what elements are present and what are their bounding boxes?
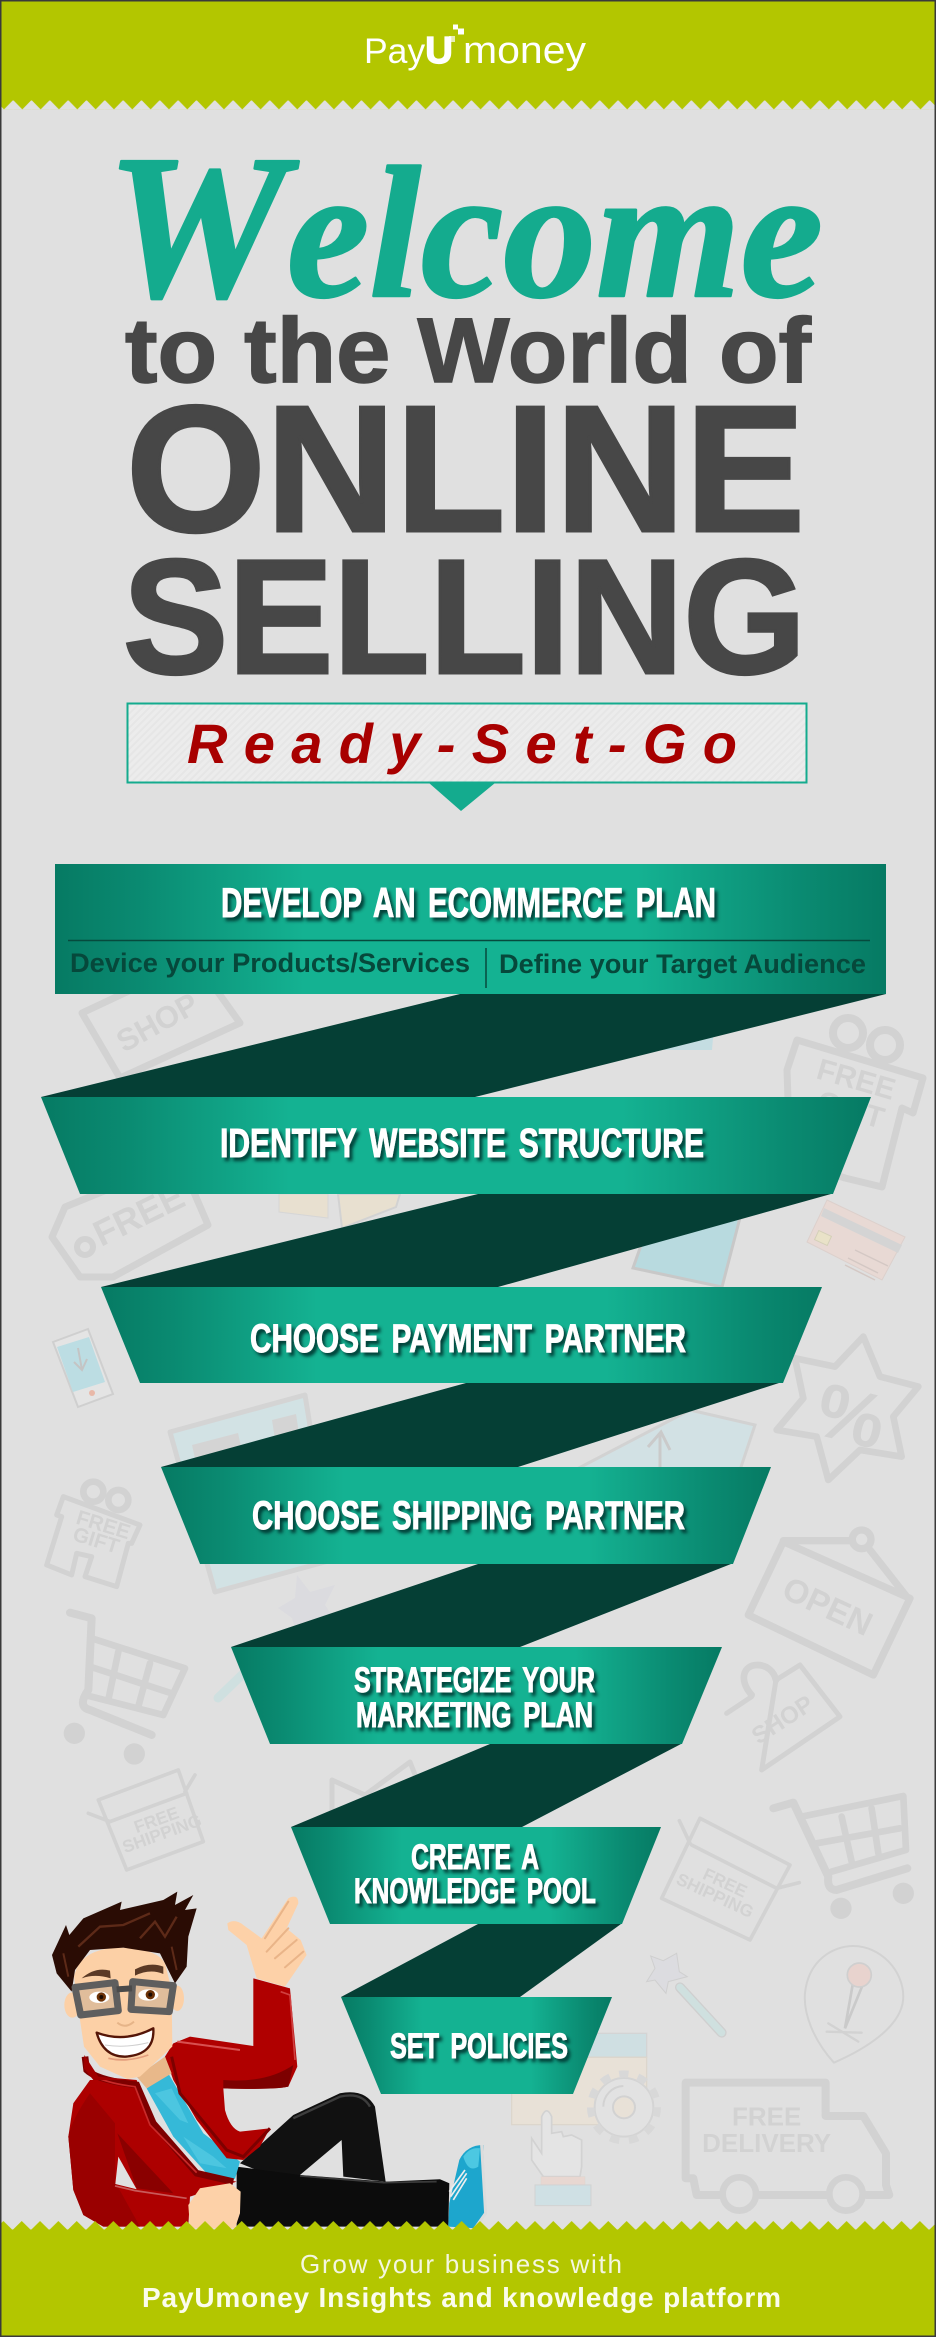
arrow: box pointer: [429, 783, 495, 811]
ribbon fold 4: [231, 1564, 731, 1647]
icon: free shipping right: [662, 1818, 799, 1940]
icon: free delivery truck: [686, 2083, 889, 2211]
icon: free shipping left: [88, 1770, 204, 1870]
panel: identify website structure: IDENTIFY WEBSITE STRUCTURE: [220, 1120, 704, 1166]
nose: [117, 2022, 134, 2026]
icon: settings panel with hand: [512, 2033, 657, 2206]
icon: open sign: OPEN: [777, 1570, 878, 1644]
icon: shopping cart left: [64, 1613, 185, 1765]
icon: free gift left: GIFT: [70, 1523, 122, 1559]
icon: free gift right: GIFT: [813, 1085, 888, 1136]
footer text: second line: PayUmoney Insights and knowledge platform: [142, 2282, 781, 2313]
panel: develop an ecommerce plan: [55, 864, 886, 994]
footer band: [0, 2221, 936, 2337]
icon: boxes behind second fold: [279, 1194, 400, 1228]
panel: create a knowledge pool: KNOWLEDGE POOL: [354, 1872, 596, 1911]
title: to the World of: to the World of: [125, 300, 811, 402]
icon: phone: [53, 1329, 113, 1407]
icon: shop sign: [82, 960, 240, 1078]
fist: [188, 2183, 241, 2228]
icon: percent star: [777, 1337, 918, 1480]
panel: choose payment partner: CHOOSE PAYMENT PARTNER: [250, 1317, 686, 1361]
panel: develop an ecommerce plan: Device your Products/Services: [70, 948, 470, 978]
t-shirt: [147, 2073, 240, 2179]
icon: shop bag: SHOP: [747, 1690, 819, 1750]
icon: map pin: [805, 1946, 903, 2063]
panel: choose shipping partner: [161, 1467, 771, 1564]
ears: [64, 1986, 184, 2018]
icon: free delivery truck: DELIVERY: [702, 2128, 831, 2158]
icon: free shipping right: SHIPPING: [673, 1869, 757, 1922]
eyebrows: [82, 1965, 163, 1978]
icon: free gift left: [47, 1482, 140, 1587]
subtitle box: Ready-Set-Go: Ready-Set-Go: [187, 712, 737, 775]
ribbon fold 6: [341, 1924, 621, 1997]
ribbon fold 5: [291, 1744, 681, 1827]
icon: free gift right: FREE: [813, 1053, 899, 1107]
panel: choose payment partner: [101, 1287, 822, 1383]
icon: free tag: [52, 1160, 208, 1277]
background icons: [47, 960, 923, 2211]
logo: PayUmoney: PayU: [364, 30, 453, 72]
icon: free delivery truck: FREE: [732, 2102, 801, 2132]
logo: PayUmoney: [364, 24, 586, 72]
ribbon fold 3: [161, 1383, 779, 1467]
icon: shop sign: SHOP: [110, 986, 204, 1059]
character: smiling man with glasses: [52, 1892, 486, 2228]
icon: envelope: [332, 1762, 425, 1820]
pointing hand: [227, 1897, 307, 1987]
panel: develop an ecommerce plan: DEVELOP AN ECOMMERCE PLAN: [221, 879, 716, 926]
ribbon fold 2: [101, 1194, 831, 1287]
ribbon fold 1: [41, 994, 886, 1097]
collar: [84, 2055, 147, 2088]
icon: wand behind fold: [218, 1575, 338, 1698]
smile: [97, 2028, 153, 2060]
panel: choose shipping partner: CHOOSE SHIPPING PARTNER: [252, 1494, 685, 1538]
icon: free gift left: FREE: [74, 1506, 133, 1544]
icon: left monitor: [170, 1395, 332, 1592]
panel: strategize your marketing plan: [231, 1647, 722, 1744]
jacket body: [68, 2057, 237, 2227]
panel: identify website structure: [41, 1097, 871, 1194]
panel: develop an ecommerce plan: Define your Target Audience: [499, 949, 866, 979]
title: Welcome: Welcome: [106, 112, 823, 341]
icon: free shipping left: SHIPPING: [120, 1810, 204, 1857]
logo: PayUmoney: money: [463, 30, 586, 72]
icon: free shipping left: FREE: [131, 1802, 181, 1837]
icon: free gift right: [787, 1018, 923, 1187]
icon: shopping cart right: [773, 1796, 914, 1919]
icon: free tag: FREE: [87, 1175, 191, 1254]
icon: wand: [647, 1953, 722, 2033]
face: [74, 1948, 172, 2079]
icon: shop bag: [727, 1665, 840, 1770]
trousers: [237, 2092, 449, 2227]
subtitle box: Ready-Set-Go: [128, 704, 806, 782]
panel: strategize your marketing plan: MARKETING PLAN: [356, 1696, 593, 1735]
header band: [0, 0, 936, 109]
icon: credit card: [807, 1200, 905, 1280]
hair: [52, 1892, 197, 1992]
neck: [137, 2057, 172, 2088]
icon: tablet with arrow: [575, 1410, 755, 1470]
jacket arm and front: [165, 1978, 297, 2160]
title: ONLINE: ONLINE: [126, 369, 805, 570]
glasses and eyes: [75, 1982, 173, 2015]
panel: create a knowledge pool: CREATE A: [411, 1838, 539, 1877]
icon: free shipping right: FREE: [700, 1864, 750, 1901]
footer text: first line: Grow your business with: [300, 2249, 622, 2279]
icon: percent star: %: [808, 1367, 894, 1466]
panel: set policies: SET POLICIES: [390, 2027, 568, 2066]
icon: tablet behind fold: [633, 1015, 742, 1287]
panel: create a knowledge pool: [291, 1827, 661, 1924]
shoe: [448, 2145, 486, 2228]
title: SELLING: SELLING: [123, 525, 806, 708]
icon: open sign: [748, 1530, 910, 1675]
panel: strategize your marketing plan: STRATEGIZE YOUR: [354, 1661, 595, 1700]
panel: set policies: [341, 1997, 612, 2094]
